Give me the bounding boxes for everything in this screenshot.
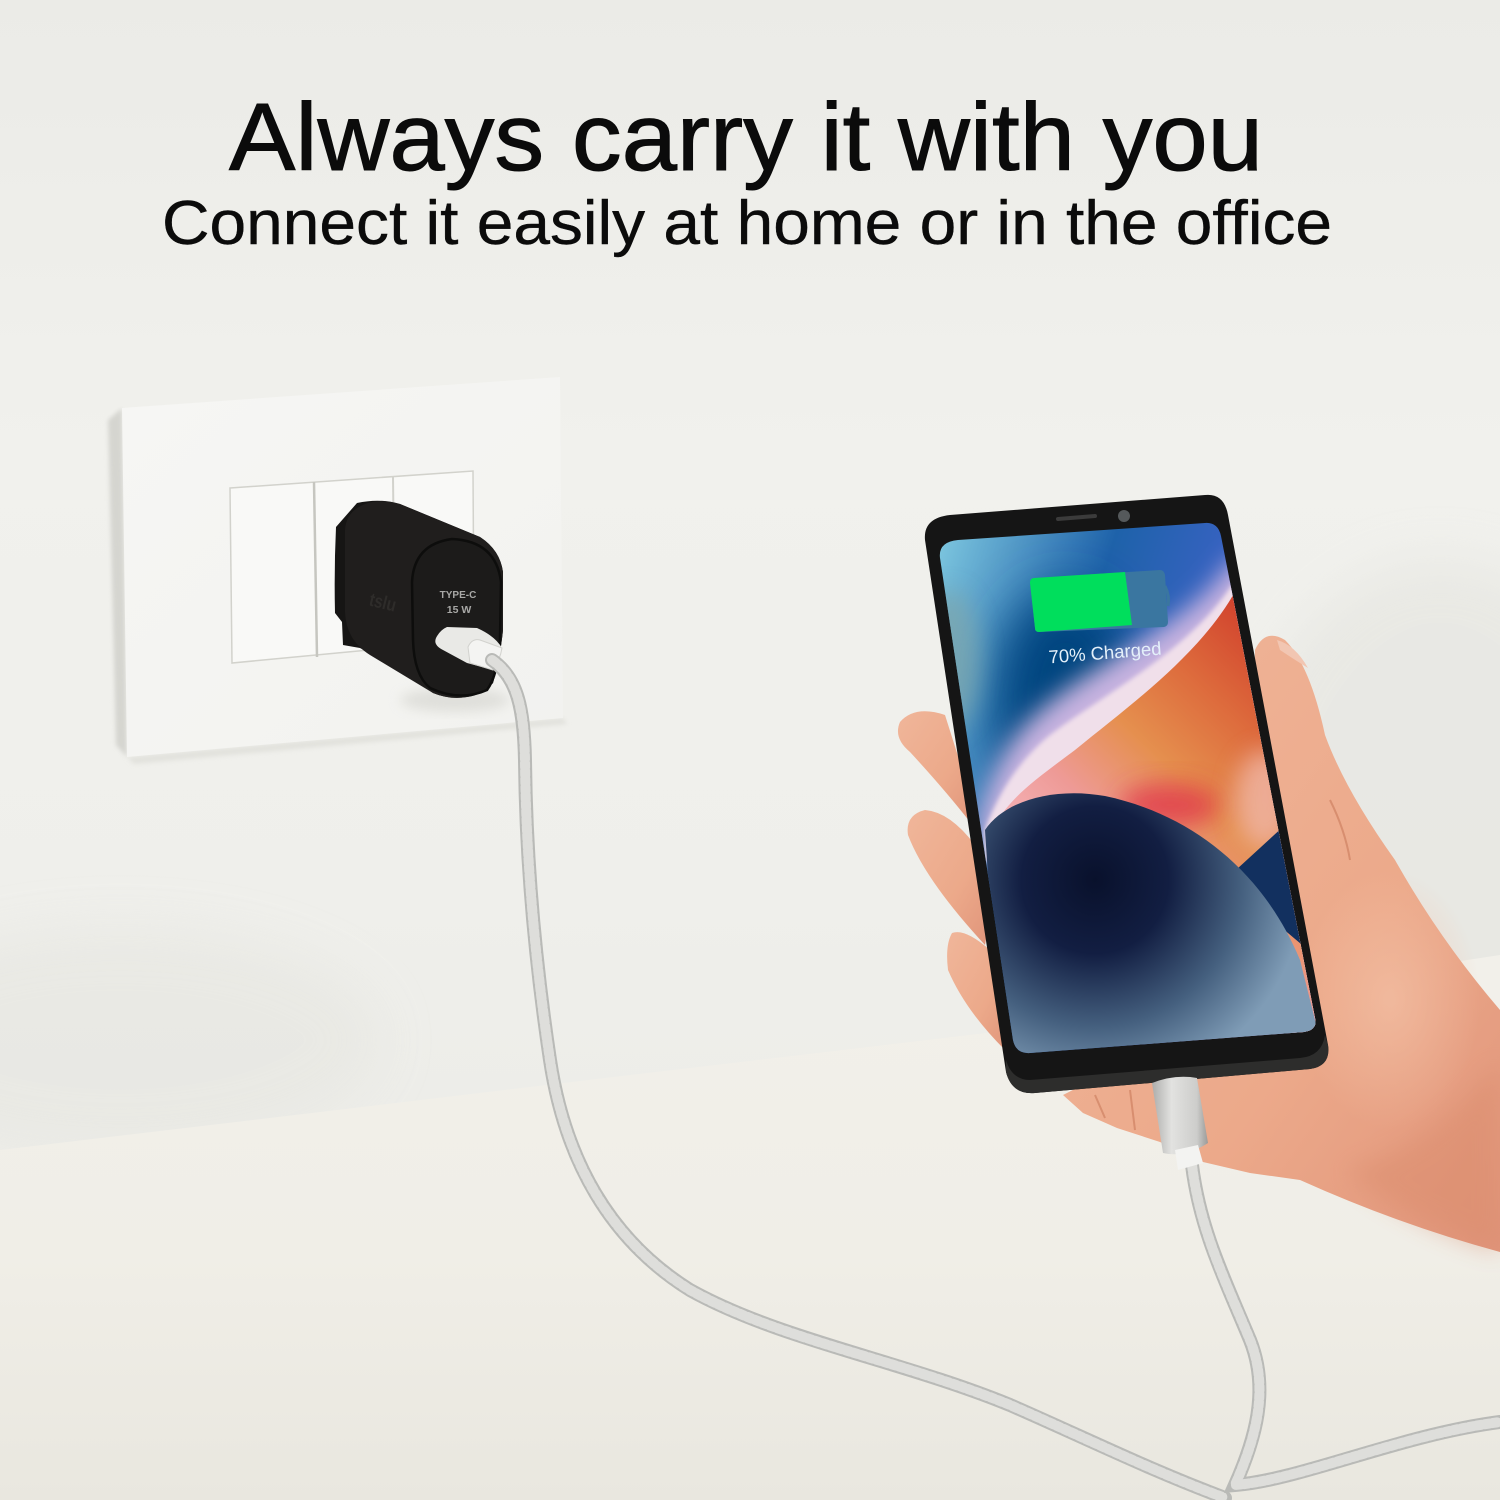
camera and speaker [1058,510,1130,522]
wall plate [108,377,567,764]
brand mark: tslu [367,588,399,616]
braided cable from charger [492,660,1225,1498]
table surface [0,955,1500,1500]
label: type-c 15 w [440,590,476,616]
smartphone [920,495,1340,1170]
USB charger [335,501,510,712]
usb-c plug at phone [1152,1077,1208,1170]
braided cable to phone [1192,1165,1500,1485]
label: type-c 15 w: TYPE-C [440,590,476,601]
battery status text: 70% Charged [1048,638,1162,667]
label: type-c 15 w: 15 W [447,604,471,616]
usb-c plug [435,627,502,670]
hand: fingers [898,711,1010,1050]
charger front face [412,539,501,696]
thumb nail [1277,640,1308,668]
phone screen wallpaper [940,522,1316,1054]
finger creases [1095,800,1350,1130]
hand: palm and thumb [1063,636,1500,1252]
switch panels [230,471,474,663]
phone body [925,495,1328,1093]
subheading: Connect it easily at home or in the office [162,189,1332,258]
headline: Always carry it with you [229,84,1263,191]
battery icon [1030,570,1169,632]
